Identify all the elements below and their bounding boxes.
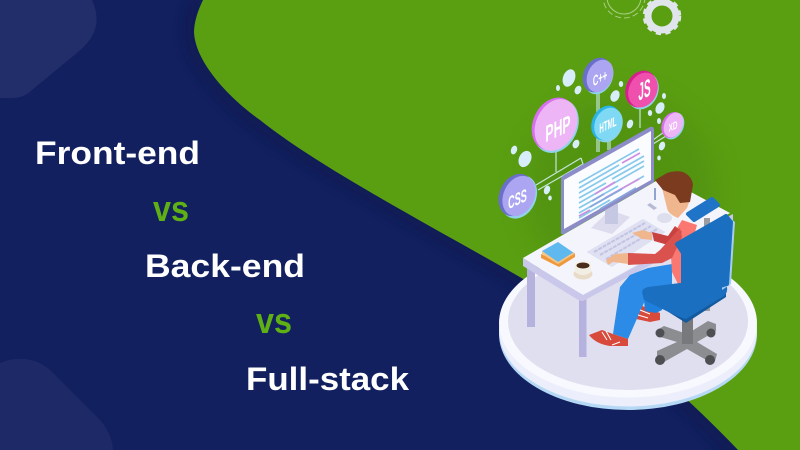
back shoe — [635, 305, 660, 322]
chair lower pole — [704, 285, 710, 311]
monitor — [561, 127, 654, 234]
keyboard rows — [594, 223, 657, 259]
illustration: developer at desk — [492, 53, 757, 410]
developer figure — [589, 171, 697, 346]
heading: Full-stack: Full-stack — [246, 361, 409, 397]
platform side — [499, 254, 757, 406]
torso — [670, 220, 697, 296]
tech bubbles — [492, 53, 688, 225]
platform white rim — [499, 248, 757, 398]
heading: Front-end: Front-end — [35, 135, 200, 171]
floating dots — [510, 67, 666, 200]
chair column — [682, 318, 693, 344]
icon: books — [541, 242, 575, 267]
bubble: HTML: HTML — [599, 114, 617, 137]
monitor frame — [561, 127, 654, 234]
platform blue underside — [499, 258, 757, 410]
platform inner surface — [508, 252, 748, 390]
office chair — [642, 199, 735, 323]
green background panel — [194, 0, 800, 450]
label: first vs: vs — [153, 188, 189, 229]
front arm — [628, 228, 682, 265]
bubble: CSS: CSS — [508, 186, 527, 214]
bubble: XD — [657, 109, 688, 143]
bubble: PHP — [523, 90, 587, 160]
chair seat — [642, 283, 727, 319]
bubble: XD: XD — [669, 118, 678, 134]
connector lines — [536, 92, 666, 190]
back leg — [643, 290, 662, 313]
bubble: C++: C++ — [593, 66, 607, 90]
front hand — [606, 253, 628, 265]
monitor stand neck — [605, 204, 618, 224]
front leg — [613, 264, 672, 339]
illustration shadow on green — [525, 95, 715, 285]
desk — [523, 177, 733, 357]
hair — [655, 171, 693, 203]
chair wheels — [655, 328, 716, 365]
desk leg back — [527, 262, 535, 327]
bubble: CSS — [492, 168, 544, 225]
code lines — [579, 149, 644, 218]
label: second vs: vs — [256, 300, 292, 341]
icon: mouse — [657, 213, 672, 223]
bubble: HTML — [586, 101, 628, 147]
bubble: PHP: PHP — [545, 111, 571, 148]
chair headrest — [688, 199, 718, 220]
bubble: JS: JS — [638, 74, 651, 107]
icon: outlined gear — [603, 0, 645, 18]
desk edge — [523, 214, 733, 301]
icon: gears — [603, 0, 679, 33]
green edge shadow — [189, 0, 734, 450]
chair star legs — [657, 321, 717, 362]
monitor screen — [564, 131, 651, 229]
desk items — [541, 188, 672, 280]
icon: coffee cup — [574, 260, 592, 280]
decorative shape: top left — [0, 0, 97, 98]
icon: small tray — [647, 203, 657, 210]
heading: Back-end: Back-end — [145, 248, 305, 284]
icon: keyboard — [585, 218, 667, 268]
decorative shape: bottom left — [0, 359, 113, 450]
icon: pen stick — [654, 188, 656, 200]
chair pole — [704, 218, 710, 232]
back hand — [632, 230, 652, 240]
chair backrest — [677, 216, 731, 297]
desk top — [523, 177, 730, 295]
chair backrest edge — [722, 214, 735, 290]
desk leg front — [579, 290, 586, 357]
front shoe — [589, 330, 628, 346]
chair seat underside — [643, 291, 726, 323]
chair base — [655, 318, 717, 365]
bubble: JS — [619, 65, 665, 115]
bubble: C++ — [577, 53, 619, 99]
neck and face — [662, 188, 690, 218]
shoe stripes — [602, 310, 650, 345]
back arm — [652, 226, 682, 245]
monitor base — [591, 210, 630, 234]
round platform — [499, 248, 757, 410]
icon: solid gear — [645, 0, 679, 33]
